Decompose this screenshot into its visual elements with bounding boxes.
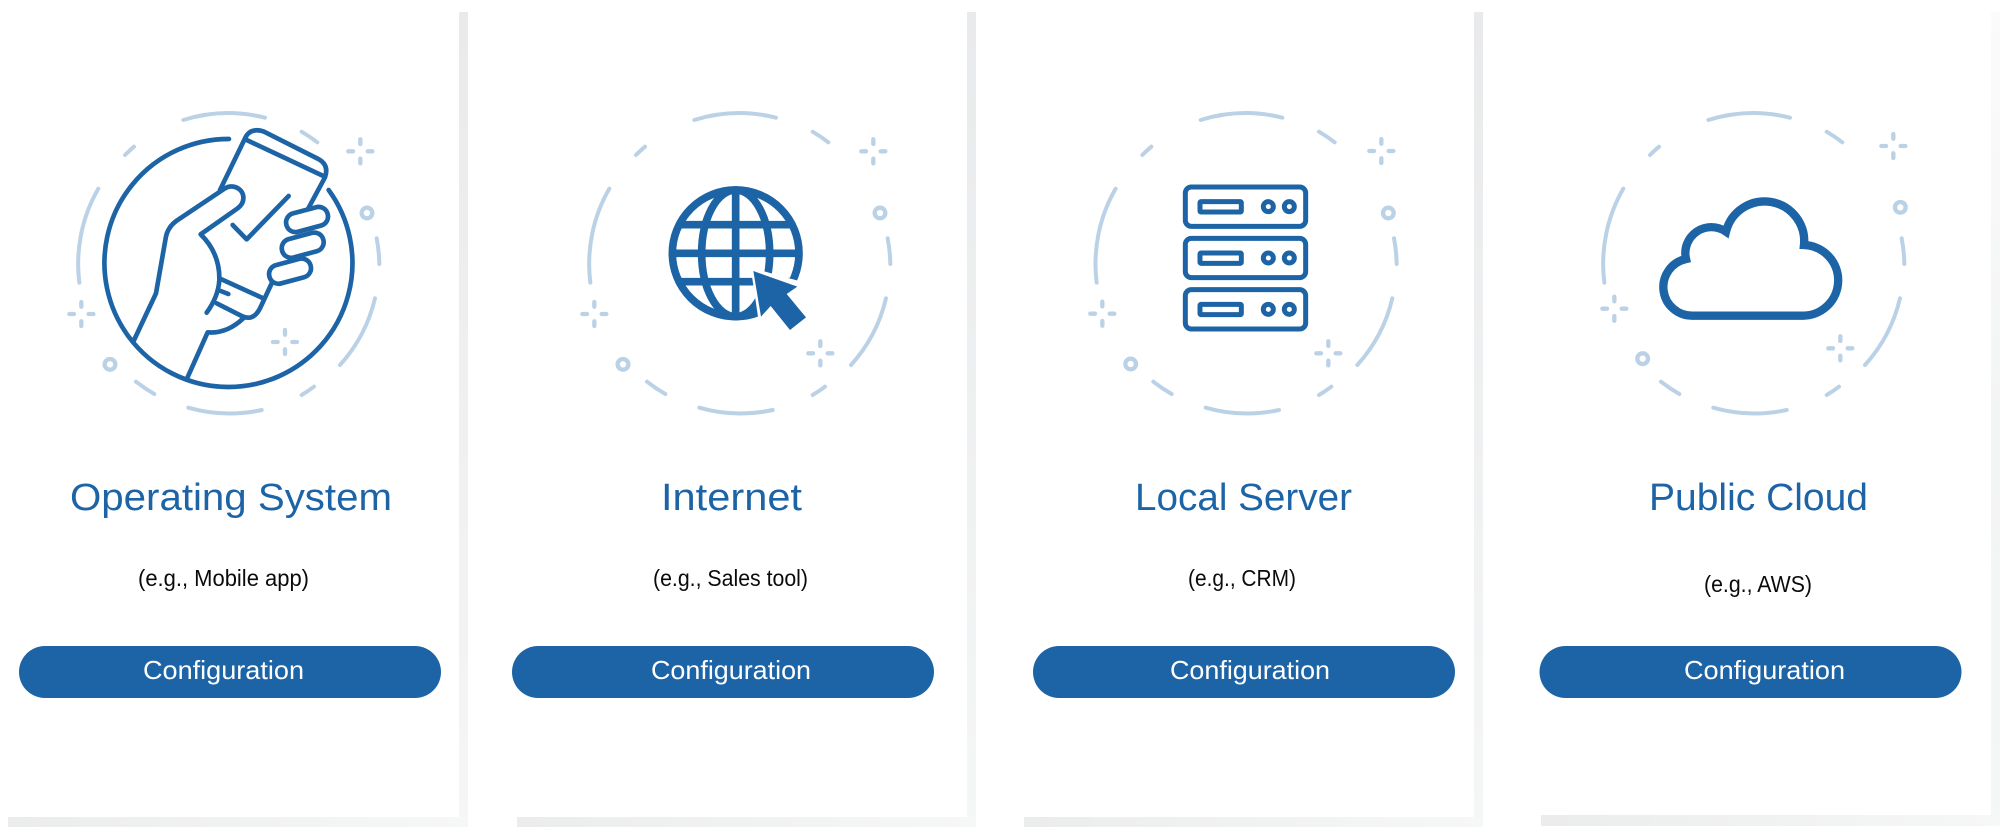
- button: configuration: [1033, 646, 1455, 698]
- button: configuration: Configuration: [651, 655, 811, 685]
- panel: internet: [468, 0, 976, 827]
- button: configuration: Configuration: [143, 655, 304, 685]
- button: configuration: [1540, 646, 1962, 698]
- heading: internet: Internet: [661, 477, 802, 519]
- panel: public cloud: [1483, 0, 2000, 826]
- icon: server rack in dashed ring: [1090, 113, 1397, 413]
- heading: local server: Local Server: [1135, 477, 1352, 519]
- heading: public cloud: Public Cloud: [1649, 477, 1868, 519]
- heading: operating system: Operating System: [70, 477, 392, 519]
- panel: operating system: [0, 0, 468, 827]
- panel: local server: [976, 0, 1483, 827]
- text: aws example: (e.g., AWS): [1704, 571, 1812, 597]
- text: mobile app example: (e.g., Mobile app): [138, 565, 309, 591]
- button: configuration: [19, 646, 441, 698]
- text: crm example: (e.g., CRM): [1188, 565, 1296, 591]
- icon: hand holding phone in dashed ring: [69, 113, 379, 413]
- icon: cloud in dashed ring: [1602, 113, 1906, 413]
- icon: globe with cursor in dashed ring: [582, 113, 890, 413]
- text: sales tool example: (e.g., Sales tool): [653, 565, 808, 591]
- button: configuration: [512, 646, 934, 698]
- button: configuration: Configuration: [1684, 655, 1845, 685]
- button: configuration: Configuration: [1170, 655, 1330, 685]
